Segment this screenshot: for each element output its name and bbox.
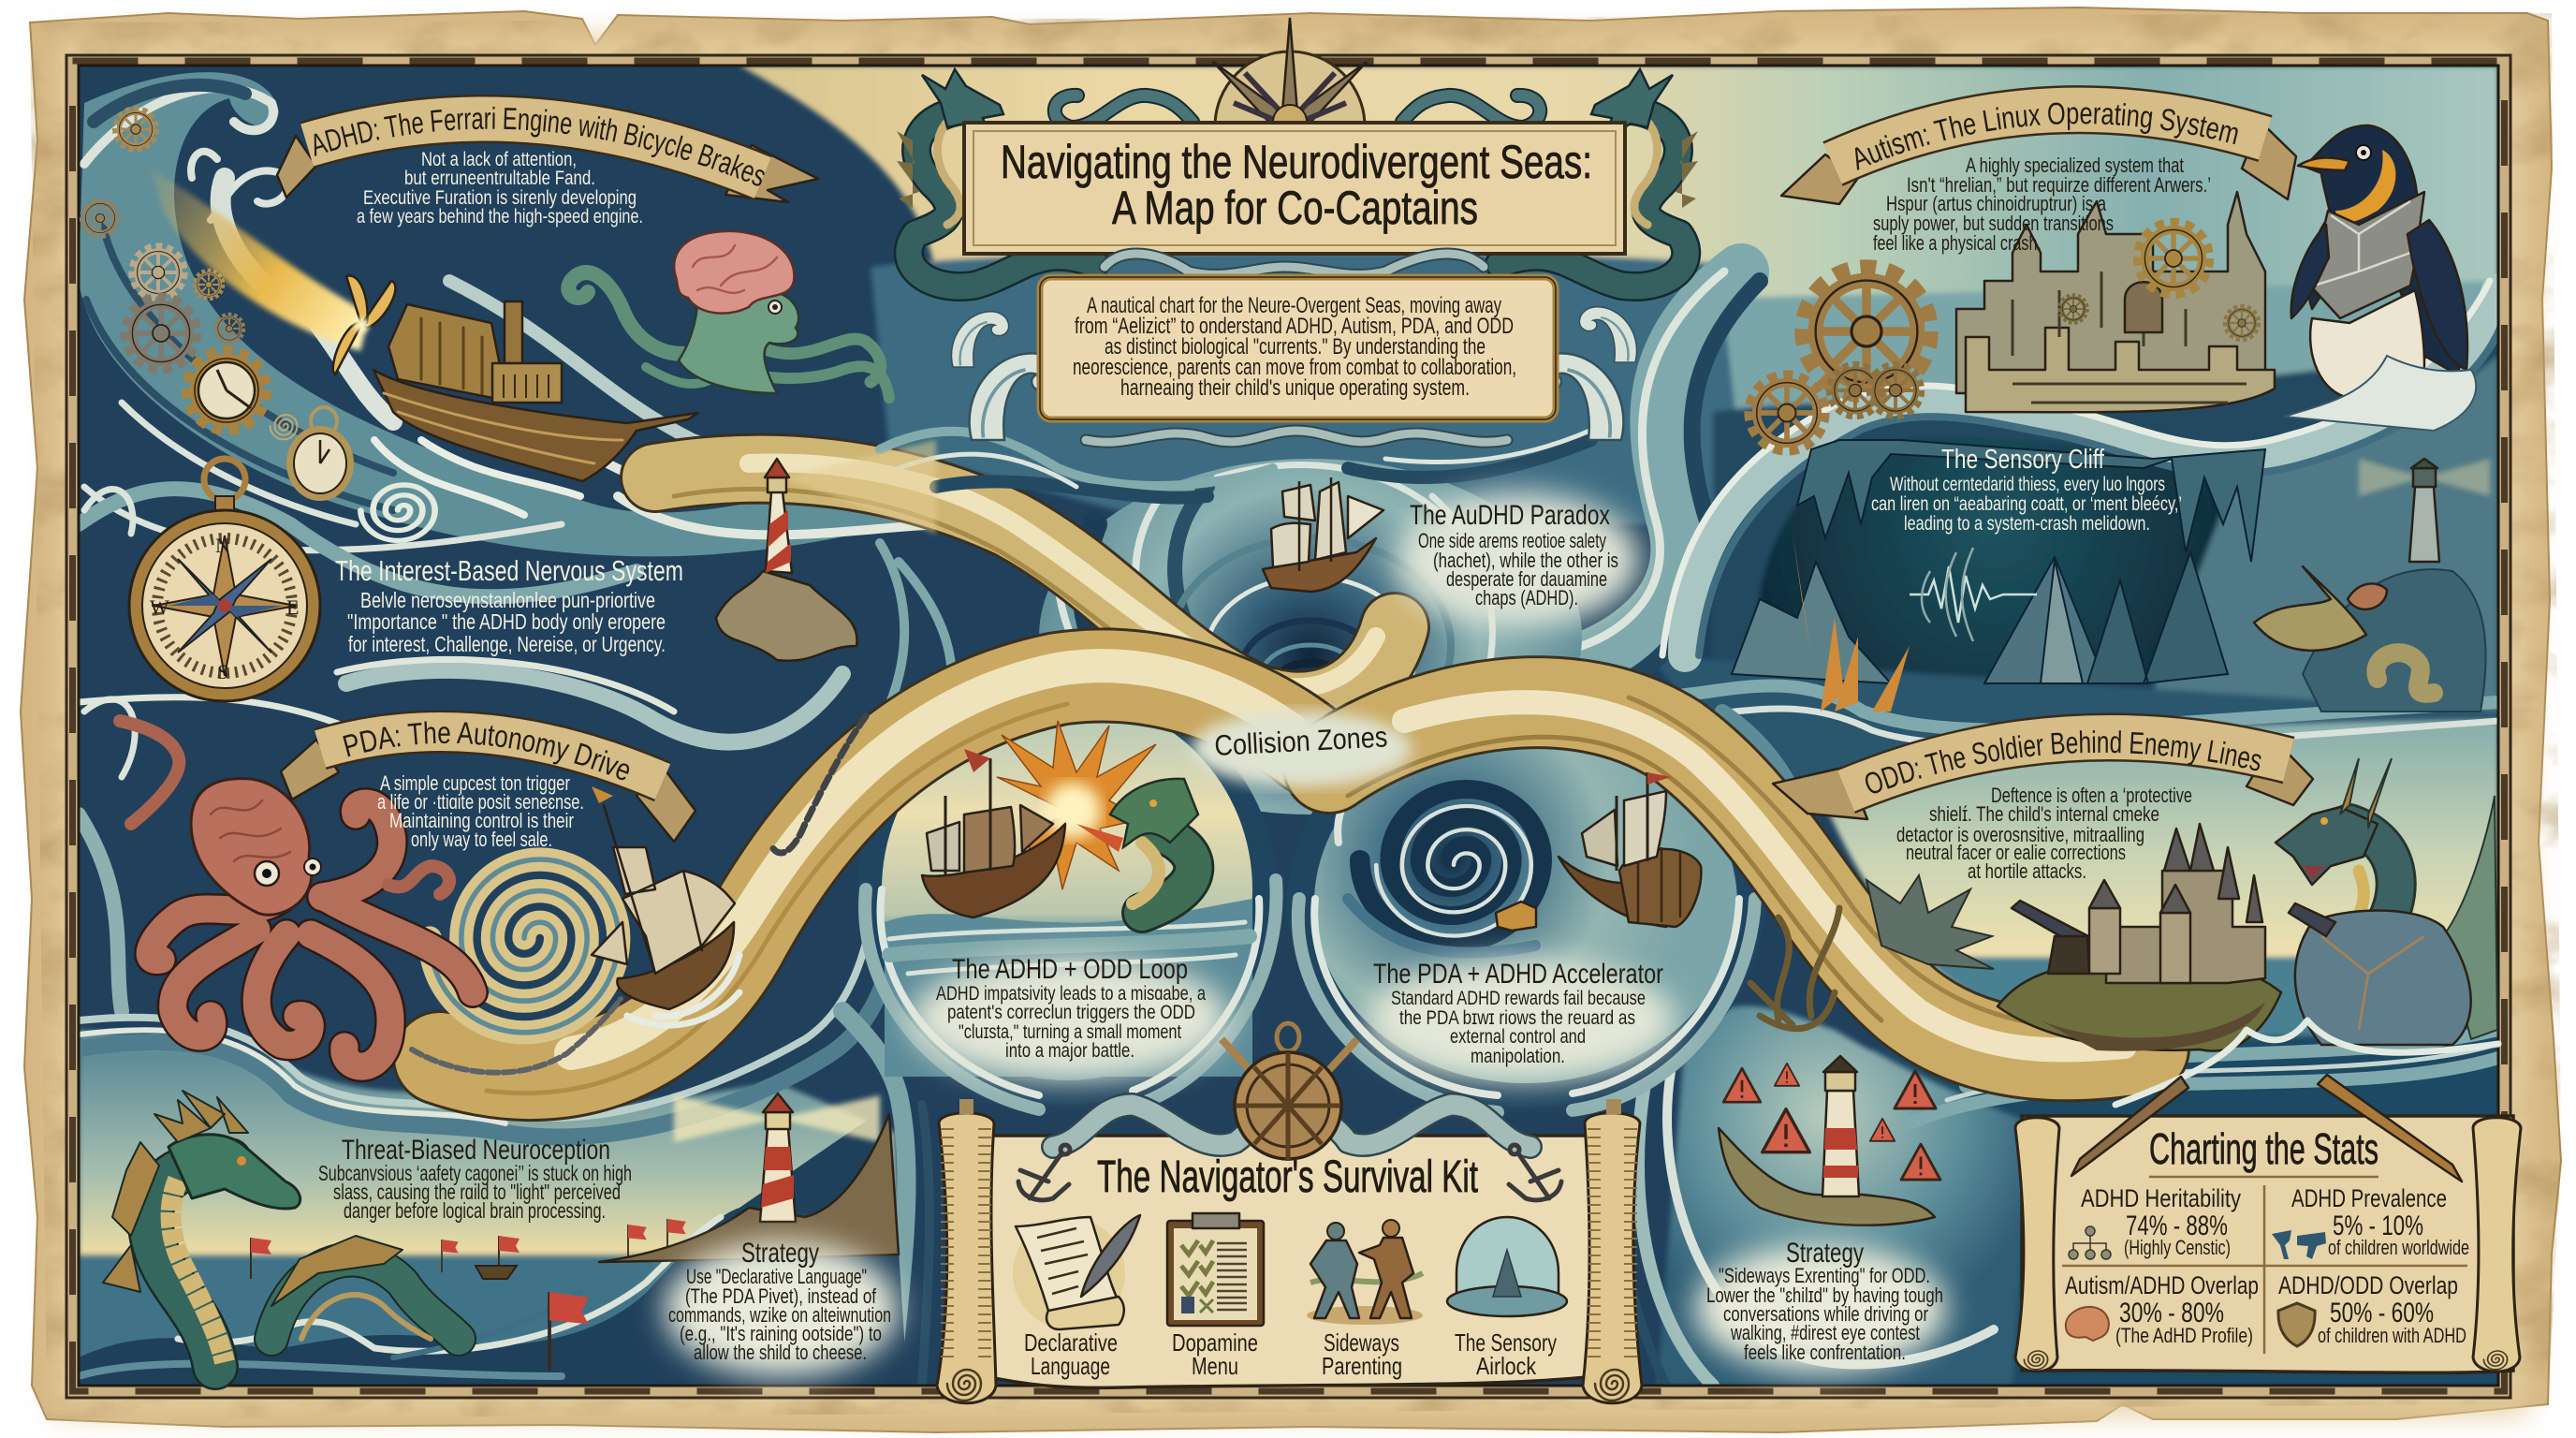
whirlpool [1039,459,1582,814]
icon: lighthouse on rock [716,440,936,661]
icon: brass compass [129,459,320,701]
stat: ADHD heritability: (Highly Censtic) [2124,1236,2231,1259]
ornament scrolls [1086,254,1507,442]
text: autism body: A highly specialized system that [1966,154,2184,177]
panel: threat-biased neuroception [103,1091,899,1376]
text: autism body: suply power, but sudden transitions [1873,212,2114,235]
stat: autism/ADHD overlap: Autism/ADHD Overlap [2065,1271,2259,1299]
stat: ADHD heritability [2069,1184,2241,1259]
icon: chained ship [412,716,866,1073]
icon: gears and clocks [82,110,354,501]
intro text [1073,293,1516,401]
stat: ADHD prevalence: of children worldwide [2328,1236,2469,1259]
scroll body [2022,1116,2513,1372]
panel: PDA autonomy [113,710,869,1082]
intro text: from “Aelizict” to onderstand ADHD, Autism, PDA, and ODD [1075,314,1514,339]
banner title: PDA: The Autonomy Drive [343,721,629,781]
icon: galleon on whirlpool [1263,477,1383,592]
text: AuDHD: (hachet), while the other is [1433,549,1618,572]
icon: bay lighthouse [599,1093,899,1262]
banner [1780,85,2297,206]
text: ODD body: at hortile attacks. [1968,859,2086,883]
stat: ADHD/ODD overlap: 50% - 60% [2330,1298,2434,1328]
explosion core [1045,783,1101,839]
dividers [2062,1177,2467,1354]
text: threat [318,1135,632,1223]
text: sensory cliff: leading to a system-crash melidown. [1904,513,2150,535]
ornament knots [1053,1105,1530,1147]
stat: ADHD/ODD overlap: of children with ADHD [2318,1324,2466,1347]
icon: armoured penguin [2284,125,2476,431]
scroll body [985,1136,1595,1387]
text: AuDHD: One side arems reotioe salety [1418,529,1606,552]
kit labels: Declarative [1024,1328,1118,1357]
heading: Collision Zones [1214,720,1388,762]
kit labels: Language [1031,1352,1110,1380]
collision circles [856,683,1764,1112]
intro text: harneaing their child's unique operating system. [1120,375,1470,401]
icon: wreck driftwood [1750,908,1839,1029]
text: sensory cliff: can liren on “aeabaring coatt, or ‘ment bleécy,’ [1871,493,2182,515]
text: accelerator: Standard ADHD rewards fail because [1391,987,1646,1009]
icon: brass compass: S [217,660,228,683]
text: strategy left: Use "Declarative Language" [686,1265,867,1288]
icon: thorn island [1866,875,1994,969]
title text [1001,136,1592,234]
icon: colliding ship [922,749,1065,917]
text: sensory cliff: The Sensory Cliff [1941,445,2105,475]
stats heading: Charting the Stats [2149,1124,2378,1173]
icon: brass compass: W [150,595,169,619]
wave crest [2115,1020,2498,1105]
foam blob behind text [1397,492,1640,627]
title text: A Map for Co-Captains [1112,182,1478,234]
title text: Navigating the Neurodivergent Seas: [1001,136,1592,188]
icon: world map [2272,1230,2326,1259]
stat: ADHD heritability: ADHD Heritability [2081,1184,2241,1212]
panel: interest-based nervous system [129,440,936,701]
text: PDA body: a life or ·ttiɑite posit seneɛnse. [377,790,584,814]
icon: sideways parenting walkers [1307,1220,1423,1325]
icon: castle island [1998,824,2281,1051]
stat: ADHD prevalence [2272,1184,2469,1259]
text: ODD body: shielɪ́. The child's internal cmeke [1929,802,2159,826]
panel: ODD soldier [1694,725,2498,1372]
icon: warning lighthouse [1719,1056,1940,1225]
stat: ADHD prevalence: 5% - 10% [2333,1211,2423,1241]
icon: compass wheel with swords [1222,1023,1357,1161]
text: strategy right: conversations while driving or [1723,1302,1928,1326]
text: AuDHD: desperate for dauamine [1446,567,1607,591]
text: strategy left: (The PDA Pivet), instead of [685,1284,877,1308]
icon: sea serpent [103,1091,459,1367]
stat: ADHD heritability: 74% - 88% [2126,1211,2228,1241]
text: PDA body: A simple cupcest ton trigger [380,771,570,795]
text: PDA body: only way to feel sale. [411,828,552,851]
icon: family tree [2069,1226,2111,1259]
text: accelerator: the PDA bɪwɪ riows the reuard as [1399,1006,1635,1029]
text: strategy right: Strategy [1786,1238,1864,1269]
text: ADHD + ODD loop: patent's correclun triggers the ODD [947,1001,1195,1023]
icon: cliff lighthouse [2303,459,2490,712]
text: threat: Threat-Biased Neuroception [342,1135,610,1166]
sea serpent right [1402,69,1698,286]
icon: brain-headed sea creature [568,231,889,398]
text: AuDHD: The AuDHD Paradox [1410,500,1610,531]
kit title: The Navigator's Survival Kit [1097,1152,1478,1202]
text: ADHD + ODD loop: ADHD impatsivity leads to a misɑabe, a [936,982,1206,1005]
title plate [964,123,1625,254]
intro text: as distinct biological "currents." By understanding the [1105,334,1486,360]
banner [275,95,820,204]
icon: armored dragon [2276,758,2497,1045]
icon: octopus [120,721,473,1066]
panel: title and intro [897,18,1698,442]
text: strategy right: feels like confrentation. [1744,1341,1906,1364]
icon: red flags [251,1219,686,1371]
kit labels: Menu [1192,1352,1238,1380]
text: interest-based: "Importance " the ADHD body only eropere [347,609,666,634]
text: ADHD body: but erruneentrultable Fand. [404,168,595,189]
kit labels: Airlock [1476,1352,1537,1380]
text: accelerator [1373,959,1663,1067]
left roller [2015,1118,2059,1372]
foam blob behind accelerator text [1367,960,1676,1081]
text: ADHD + ODD loop: into a major battle. [1005,1039,1134,1062]
stat: ADHD/ODD overlap: ADHD/ODD Overlap [2278,1271,2458,1299]
text: ADHD body: a few years behind the high-speed engine. [357,206,643,227]
text: autism body [1873,154,2211,255]
banner [281,715,695,842]
text: sensory cliff: Without cerntedarid thiess, every luo lngors [1890,474,2165,495]
banner [1773,725,2313,819]
text: strategy right [1706,1238,1943,1364]
text: ADHD + ODD loop: "cluɪsta," turning a small moment [959,1020,1181,1043]
sea serpent left [897,69,1193,286]
icon: fire dragon [1076,779,1198,913]
icon: sea creatures [2254,566,2434,694]
text: autism body: Isn't “hrelian,” but requirze different Arwers.’ [1907,173,2211,197]
icon: brass compass: N [215,534,230,557]
intro plate [1040,277,1556,419]
banner title: Autism: The Linux Operating System [1855,103,2238,170]
text: interest-based: for interest, Challenge, Nereise, or Urgency. [348,632,666,656]
icon: explosion [997,721,1156,889]
text: ODD body: detactor is overosnsitive, mitraalling [1896,823,2144,846]
text: ADHD body: Not a lack of attention, [421,149,577,170]
icon: brain [2066,1307,2109,1341]
icon: castle city [1956,192,2275,412]
panel: navigator's survival kit [937,1023,1642,1403]
text: accelerator: external control and [1450,1025,1586,1048]
icon: sensory airlock dome [1447,1217,1567,1316]
text: autism body: Hspur (artus chinoidruptrur) is a [1886,192,2107,215]
text: ADHD body [357,149,643,227]
panel: ADHD Ferrari engine [79,75,927,579]
banner title: ODD: The Soldier Behind Enemy Lines [1865,730,2261,794]
icon: declarative language scroll [1013,1215,1140,1329]
text: ODD body: neutral facer or ealie corrections [1906,841,2126,864]
kit labels [1024,1328,1557,1380]
swirl detail near title water [880,421,1610,498]
icon: quill pens [2071,1075,2462,1181]
text: threat: danger before logical brain processing. [344,1198,606,1223]
text: threat: slass, causing the rɑild to "light" perceived [333,1180,621,1204]
text: AuDHD: chaps (ADHD). [1475,586,1578,609]
wave crests around intro [951,307,1637,440]
icon: flame trail [150,169,370,351]
text: accelerator: The PDA + ADHD Accelerator [1373,959,1663,990]
text: strategy left: Strategy [741,1238,819,1269]
text: ADHD + ODD loop [936,954,1206,1062]
text: accelerator: manipolation. [1471,1045,1565,1067]
icon: shield [2278,1303,2315,1346]
lower-left currents [79,814,122,1011]
foam blob behind strategy [1694,1245,1947,1372]
intro text: neorescience, parents can move from combat to collaboration, [1073,355,1516,380]
panel: AuDHD paradox [1263,477,1640,627]
icon: treasure ship [1496,772,1701,931]
stat: autism/ADHD overlap [2065,1271,2259,1347]
icon: gold spiral [430,859,619,1033]
intro text: A nautical chart for the Neure-Overgent Seas, moving away [1087,293,1501,318]
kit labels: Parenting [1322,1352,1402,1380]
text: strategy left: allow the shild to cheese. [694,1341,867,1364]
foam blob behind loop text [911,957,1229,1080]
panel: charting the stats [2015,1075,2521,1372]
text: ODD body [1896,784,2192,883]
left roller [937,1099,996,1403]
right roller [2473,1118,2521,1372]
kit labels: Dopamine [1172,1328,1258,1357]
icon: icy spires [1732,534,2228,712]
kit labels: Sideways [1324,1328,1399,1357]
stat: ADHD/ODD overlap [2278,1271,2466,1347]
panel: Autism Linux [1744,85,2477,455]
right roller [1583,1099,1642,1403]
icon: dopamine menu clipboard [1167,1213,1264,1326]
text: interest-based: Belvle neroseynstanlonlee pun-priortive [360,588,655,612]
kit labels: The Sensory [1455,1328,1557,1357]
stat: ADHD prevalence: ADHD Prevalence [2291,1184,2447,1212]
text: strategy left [668,1238,891,1364]
foam blob behind strategy [665,1241,899,1376]
panel: collision zones [911,712,1701,1081]
text: interest-based: The Interest-Based Nervous System [335,554,683,587]
text: strategy right: Lower the "ɛhilɪd" by having tough [1706,1284,1943,1307]
text: strategy left: commands, wzike on alteiwnution [668,1303,891,1327]
banner title: ADHD: The Ferrari Engine with Bicycle Brakes [315,107,765,186]
text: threat: Subcanvsious ‘aafety caɡonei’’ is stuck on high [318,1161,632,1185]
text: interest-based [335,554,683,656]
stat: autism/ADHD overlap: 30% - 80% [2119,1298,2224,1328]
text: strategy right: walking, #direst eye contest [1730,1321,1920,1344]
text: sensory cliff [1871,445,2182,535]
icon: anchors [1018,1145,1561,1200]
text: strategy right: "Sideways Exrenting" for ODD. [1719,1264,1930,1287]
icon: steam ship with engine [333,275,698,540]
text: autism body: feel like a physical crash. [1873,231,2042,255]
text: ADHD + ODD loop: The ADHD + ODD Loop [952,954,1188,985]
stat: autism/ADHD overlap: (The AdHD Profile) [2115,1324,2253,1347]
icon: brass compass: E [286,595,299,619]
text: PDA body [377,771,584,851]
text: ADHD body: Executive Furation is sirenly developing [363,187,637,209]
right side currents [1535,271,1741,674]
text: strategy left: (e.g., "It's raining ootside") to [680,1322,882,1345]
panel: sensory cliff [1732,440,2490,712]
icon: gears [1750,270,1928,449]
text: AuDHD [1410,500,1618,609]
icon: compass rose [1213,18,1367,139]
icon: stalactites [1797,440,2265,562]
foam blob behind heading [1191,712,1412,786]
gold current ribbons [440,462,2144,1093]
text: ODD body: Deftence is often a ‘protective [1991,784,2192,807]
text: PDA body: Maintaining control is their [389,809,574,832]
